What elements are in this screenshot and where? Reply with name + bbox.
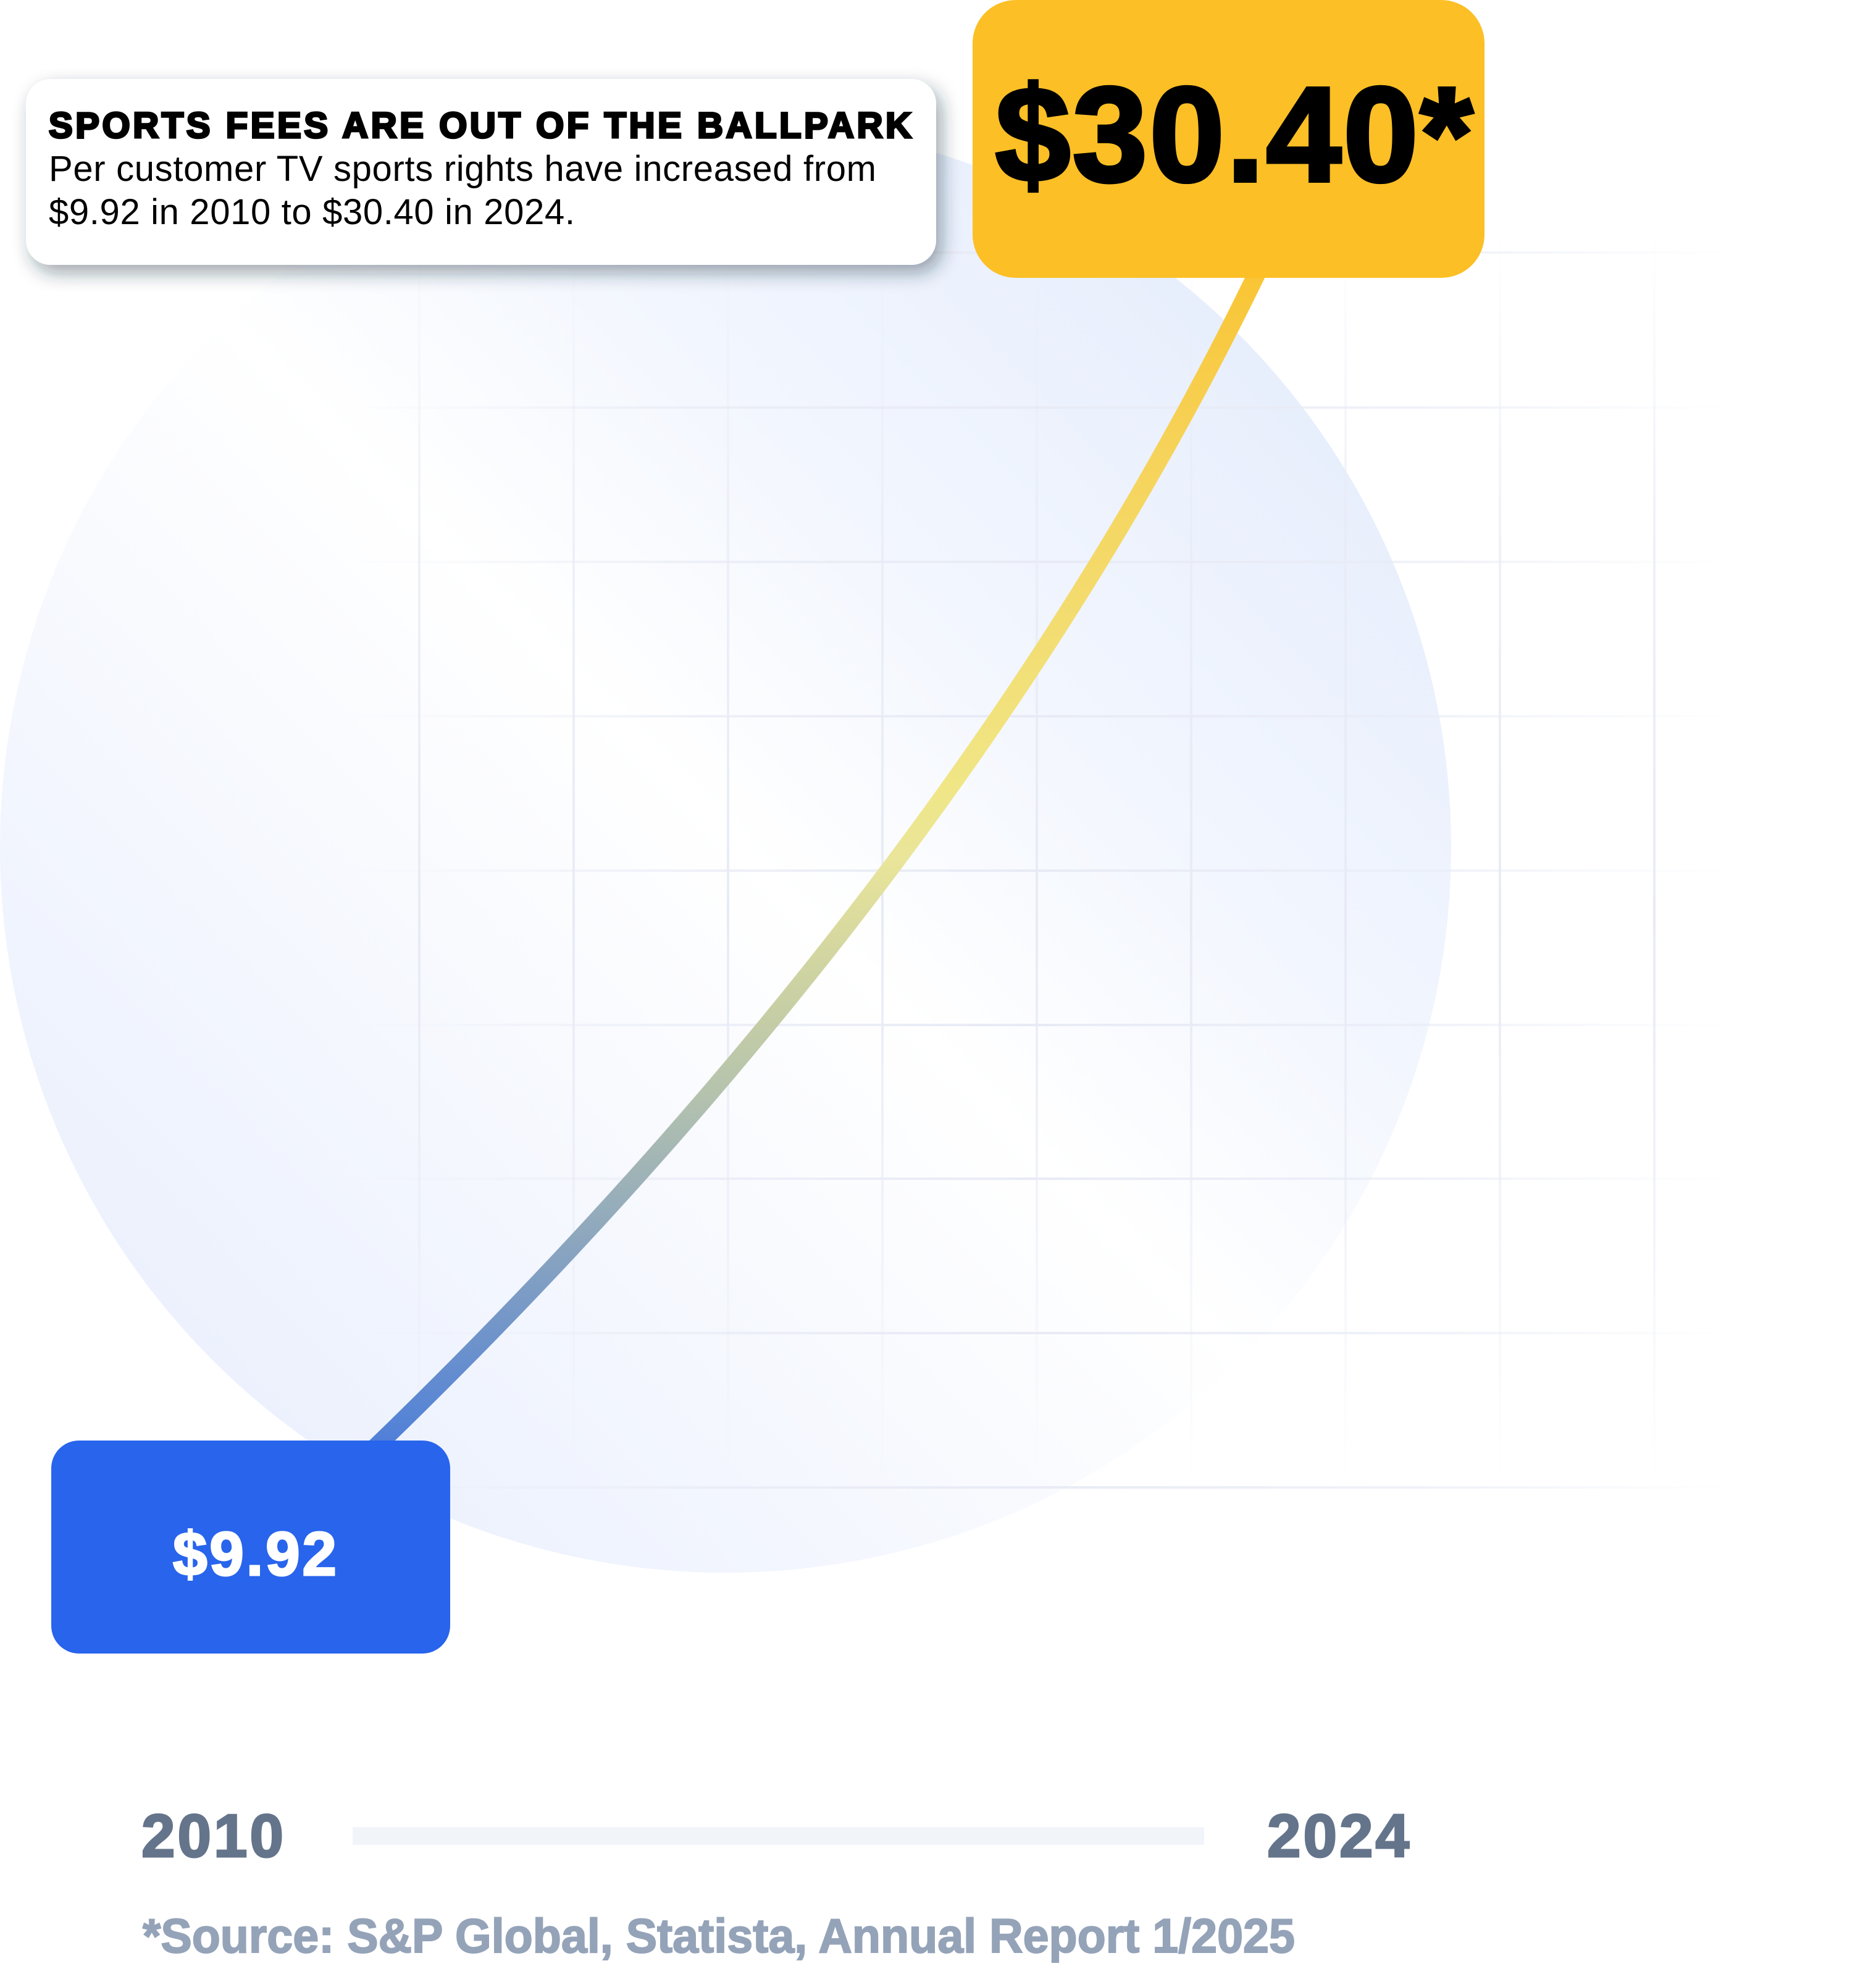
- callout body text: [49, 149, 876, 232]
- line chart curve: fee growth: [364, 259, 1263, 1458]
- source note: *Source: S&P Global, Statista, Annual Report 1/2025: [143, 1909, 1295, 1963]
- background circle: [0, 122, 1451, 1573]
- axis label: 2024: 2024: [1267, 1802, 1409, 1870]
- axis label: 2010: 2010: [141, 1802, 283, 1870]
- value box: 2024: [973, 0, 1484, 278]
- callout heading: SPORTS FEES ARE OUT OF THE BALLPARK: [49, 106, 911, 146]
- timeline bar: [353, 1827, 1204, 1845]
- value label: $9.92: $9.92: [173, 1520, 337, 1589]
- background grid: [346, 235, 1729, 1487]
- value label: $30.40*: $30.40*: [995, 60, 1473, 210]
- value box: 2010: [51, 1441, 450, 1654]
- callout card: [26, 79, 936, 265]
- callout body text: Per customer TV sports rights have increased from: [49, 149, 876, 189]
- callout body text: $9.92 in 2010 to $30.40 in 2024.: [49, 192, 575, 232]
